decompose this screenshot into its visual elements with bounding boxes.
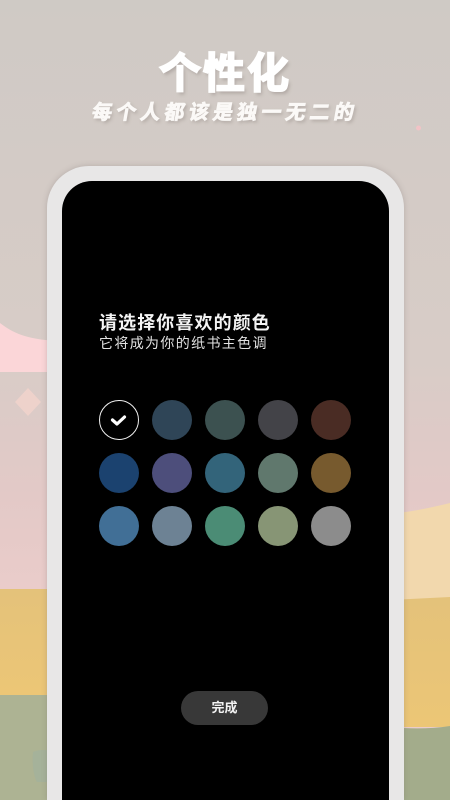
title: 个性化 <box>159 50 291 97</box>
phone screen <box>62 181 389 800</box>
color swatch grid <box>99 400 351 546</box>
done button <box>181 691 268 725</box>
subheading: 它将成为你的纸书主色调 <box>99 335 268 351</box>
subtitle: 每个人都该是独一无二的 <box>90 102 360 124</box>
heading: 请选择你喜欢的颜色 <box>99 313 271 333</box>
selected swatch with check <box>99 400 139 440</box>
done button: 完成 <box>211 700 238 715</box>
phone frame <box>47 166 404 800</box>
